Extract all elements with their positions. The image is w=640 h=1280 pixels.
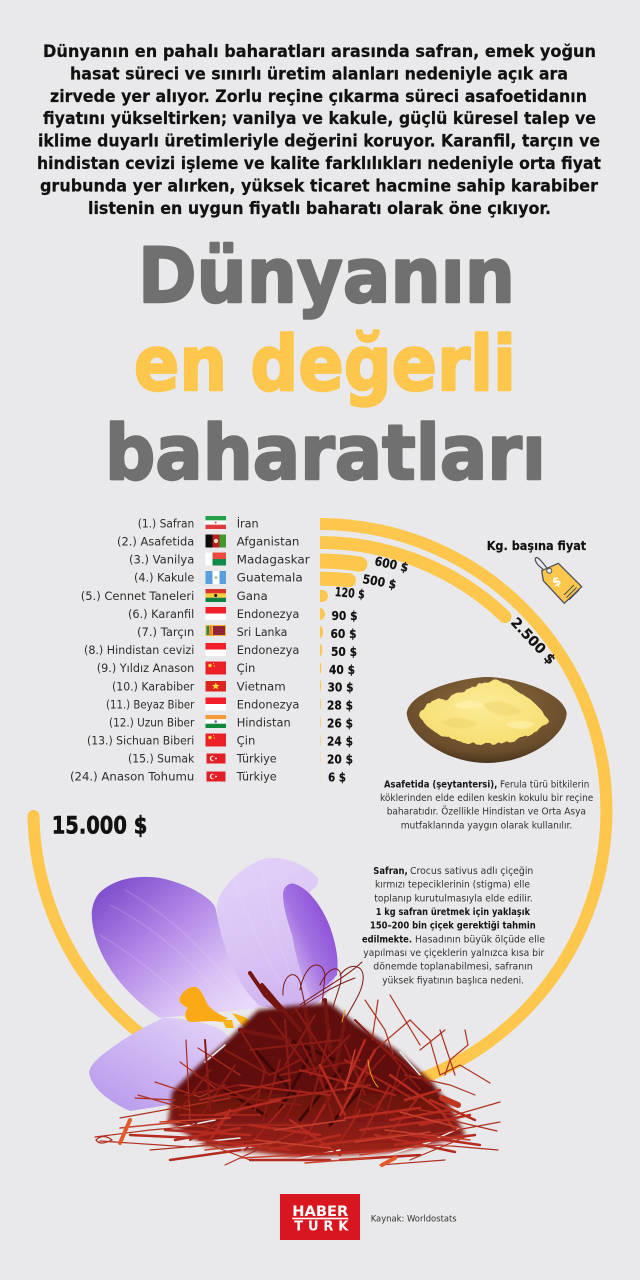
price labels: 50 $ [331, 644, 357, 659]
logo: Haberturk: TURK [294, 1220, 349, 1235]
price labels: 600 $ [373, 553, 410, 575]
image: saffron threads pile [95, 962, 500, 1165]
text: asafetida description [380, 779, 594, 832]
title [105, 231, 546, 497]
row: Safran: İran [237, 516, 259, 530]
row: Kakule [134, 571, 303, 585]
row: Vanilya [129, 552, 310, 567]
row: Karanfil [128, 607, 299, 621]
icon: price tag [535, 558, 582, 603]
row: Uzun Biber: Hindistan [237, 715, 291, 729]
row: Safran [138, 516, 259, 530]
row: Karanfil: Endonezya [237, 607, 299, 621]
text: saffron description: kırmızı tepeciklerinin (stigma) elle [375, 880, 530, 891]
row: Hindistan cevizi [84, 643, 299, 657]
row: Beyaz Biber [106, 697, 299, 711]
title: en değerli [134, 319, 516, 408]
text: saffron description: 150–200 bin çiçek gerektiği tahmin [370, 921, 536, 932]
row: Beyaz Biber: (11.) Beyaz Biber [106, 697, 194, 711]
arc: Asafetida 2.500 $ [320, 542, 512, 623]
row: Yıldız Anason: (9.) Yıldız Anason [97, 661, 194, 675]
title: baharatları [105, 408, 546, 497]
price labels: 6 $ [328, 770, 346, 784]
row: Safran: (1.) Safran [138, 516, 194, 530]
intro paragraph: hindistan cevizi işleme ve kalite farklılıkları nedeniyle orta fiyat [37, 154, 601, 173]
price labels: 90 $ [332, 608, 358, 623]
row: Cennet Taneleri: Gana [237, 589, 268, 603]
small price bars [320, 590, 328, 782]
text: asafetida description: Ferula türü bitkilerin [500, 779, 589, 790]
row: Anason Tohumu [70, 770, 277, 784]
price labels: 20 $ [327, 752, 353, 766]
price labels: 500 $ [361, 571, 398, 592]
intro paragraph: Dünyanın en pahalı baharatları arasında safran, emek yoğun [43, 42, 596, 61]
row: Anason Tohumu: (24.) Anason Tohumu [70, 770, 194, 784]
label: 15.000 $: 15.000 $ [52, 811, 147, 839]
image: crocus flower [89, 858, 338, 1111]
intro paragraph [37, 42, 601, 218]
row: Uzun Biber: (12.) Uzun Biber [109, 715, 195, 729]
image: bowl of asafetida [407, 677, 567, 763]
text: saffron description: yapılması ve çiçeklerin yalnızca kısa bir [363, 948, 544, 959]
price labels: 24 $ [327, 734, 353, 748]
row: Asafetida [117, 534, 299, 548]
row: Tarçın: Sri Lanka [237, 625, 287, 639]
row: Vanilya: Madagaskar [237, 553, 310, 567]
row: Hindistan cevizi: Endonezya [237, 643, 299, 657]
text: asafetida description: baharatıdır. Özellikle Hindistan ve Orta Asya [387, 807, 586, 818]
text: asafetida description: mutfaklarında yaygın olarak kullanılır. [401, 821, 572, 832]
price labels [327, 553, 558, 784]
row: Sichuan Biberi [87, 734, 255, 748]
legend: Kg. başına fiyat: Kg. başına fiyat [487, 539, 586, 553]
price labels: 2.500 $ [507, 615, 558, 668]
text: saffron description: edilmekte. [362, 934, 412, 945]
text: saffron description: Safran, [373, 866, 408, 877]
row: Karabiber: Vietnam [237, 679, 286, 693]
row: Cennet Taneleri: (5.) Cennet Taneleri [81, 589, 194, 603]
price labels: 40 $ [329, 662, 355, 677]
source note: Kaynak: Worldostats [371, 1215, 457, 1225]
row: Sumak: (15.) Sumak [128, 752, 195, 766]
row: Yıldız Anason: Çin [237, 661, 255, 675]
row: Beyaz Biber: Endonezya [237, 697, 299, 711]
intro paragraph: hasat süreci ve sınırlı üretim alanları nedeniyle açık ara [70, 64, 568, 83]
row: Tarçın: (7.) Tarçın [137, 625, 194, 639]
row: Yıldız Anason [97, 661, 255, 675]
intro paragraph: grubunda yer alırken, yüksek ticaret hacmine sahip karabiber [40, 176, 599, 195]
price labels: 26 $ [327, 716, 353, 730]
text: saffron description: dönemde toplanabilmesi, safranın [373, 961, 533, 972]
price labels: 120 $ [334, 584, 365, 602]
logo: Haberturk [280, 1194, 360, 1240]
row: Sumak: Türkiye [236, 752, 277, 766]
intro paragraph: fiyatını yükseltirken; vanilya ve kakule, güçlü küresel talep ve [43, 109, 596, 128]
row: Sumak [128, 752, 277, 766]
icon: price tag: $ [550, 573, 563, 590]
row: Sichuan Biberi: (13.) Sichuan Biberi [87, 734, 194, 748]
text: saffron description [362, 866, 545, 986]
row: Cennet Taneleri [81, 589, 268, 603]
row: Asafetida: (2.) Asafetida [117, 534, 194, 548]
radial bar chart arcs [28, 524, 606, 1097]
row: Kakule: Guatemala [237, 571, 303, 585]
arc: Kakule 500 $ [320, 573, 356, 587]
row: Uzun Biber [109, 715, 291, 729]
arc: Vanilya 600 $ [320, 557, 368, 572]
intro paragraph: zirvede yer alıyor. Zorlu reçine çıkarma süreci asafoetidanın [50, 87, 587, 106]
row: Sichuan Biberi: Çin [237, 734, 255, 748]
logo: Haberturk: HABER [292, 1204, 348, 1220]
price labels: 60 $ [330, 626, 356, 641]
row: Asafetida: Afganistan [237, 534, 299, 548]
row: Karabiber: (10.) Karabiber [112, 679, 195, 693]
intro paragraph: listenin en uygun fiyatlı baharatı olarak öne çıkıyor. [88, 199, 551, 218]
price labels: 28 $ [327, 698, 353, 712]
arc: Safran 15.000 $ [28, 524, 606, 1097]
text: saffron description: toplanıp kurutulmasıyla elde edilir. [374, 894, 533, 905]
row: Kakule: (4.) Kakule [134, 571, 194, 585]
row: Tarçın [137, 625, 287, 639]
text: asafetida description: Asafetida (şeytantersi), [384, 779, 497, 790]
text: saffron description: 1 kg safran üretmek için yaklaşık [376, 907, 531, 918]
spice ranking table [70, 516, 310, 784]
row: Anason Tohumu: Türkiye [236, 770, 277, 784]
text: saffron description: Crocus sativus adlı çiçeğin [410, 866, 533, 877]
title: Dünyanın [138, 231, 515, 320]
row: Karabiber [112, 679, 286, 693]
price labels: 30 $ [328, 680, 354, 694]
text: saffron description: yüksek fiyatının başlıca nedeni. [382, 975, 524, 986]
row: Hindistan cevizi: (8.) Hindistan cevizi [84, 643, 194, 657]
text: asafetida description: köklerinden elde edilen keskin kokulu bir reçine [380, 793, 594, 804]
row: Karanfil: (6.) Karanfil [128, 607, 194, 621]
row: Vanilya: (3.) Vanilya [129, 553, 194, 567]
intro paragraph: iklime duyarlı üretimleriyle değerini koruyor. Karanfil, tarçın ve [38, 132, 600, 151]
text: saffron description: Hasadının büyük ölçüde elle [415, 934, 545, 945]
